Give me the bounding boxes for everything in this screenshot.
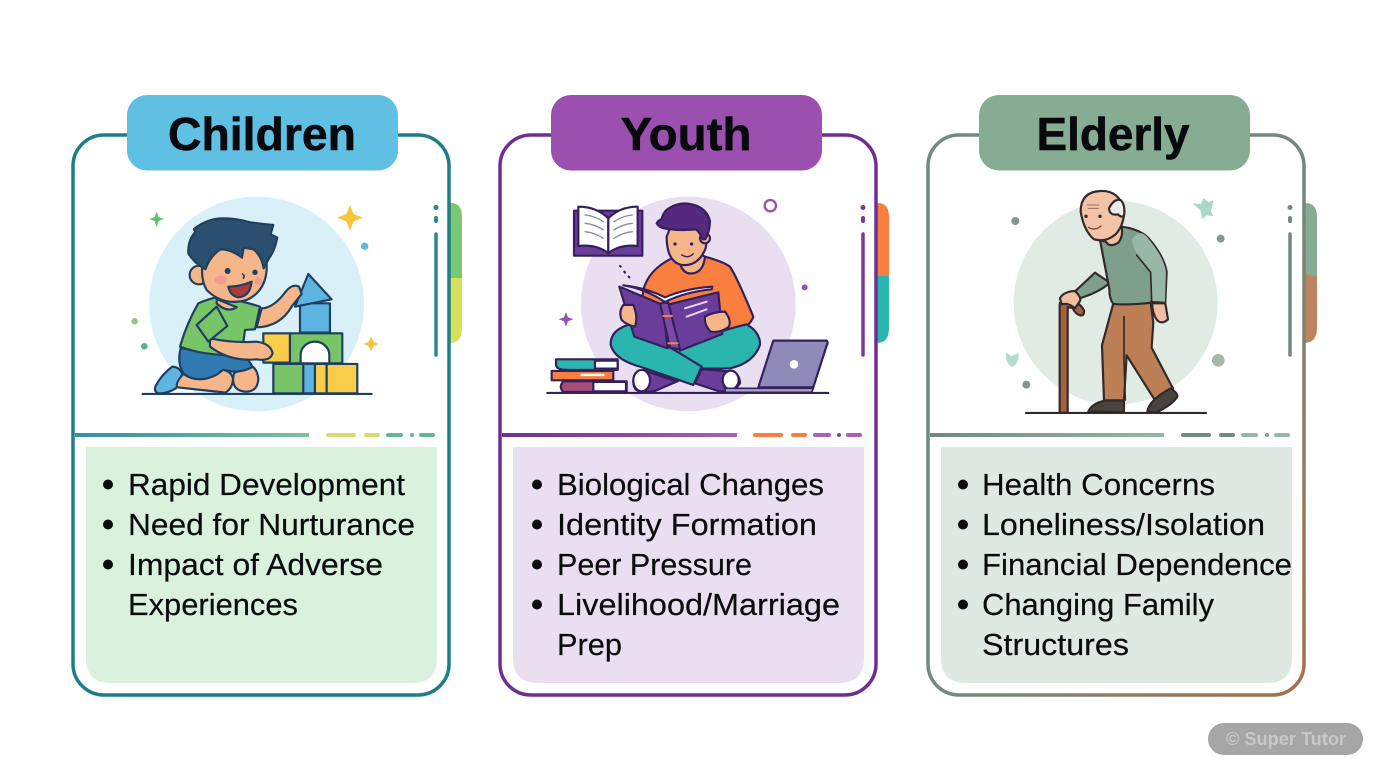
text panel: youth: Prep <box>557 627 622 662</box>
text panel: elderly <box>941 447 1292 683</box>
side tab: children <box>448 203 462 343</box>
decorative side marks: youth <box>861 206 865 355</box>
heading: children <box>127 95 398 170</box>
heading: elderly <box>979 95 1250 170</box>
text panel: youth <box>513 447 864 683</box>
decorative side marks: children <box>434 206 438 355</box>
text panel: elderly: Health Concerns <box>982 467 1215 502</box>
divider: youth <box>502 433 860 437</box>
text panel: youth: Peer Pressure <box>557 547 752 582</box>
text panel: children: Need for Nurturance <box>128 507 415 542</box>
heading: youth: Youth <box>620 108 752 160</box>
text panel: youth: Livelihood/Marriage <box>557 587 840 622</box>
side tab: youth <box>875 203 889 343</box>
panel: children <box>73 95 462 695</box>
text panel: elderly: Changing Family <box>982 587 1214 622</box>
divider: children <box>75 433 433 437</box>
text panel: children: Experiences <box>128 587 298 622</box>
illustration: child building blocks <box>131 197 379 411</box>
side tab: elderly <box>1302 203 1317 343</box>
text panel: children <box>86 447 437 683</box>
text panel: youth: Identity Formation <box>557 507 817 542</box>
watermark <box>1208 723 1363 755</box>
card outline: children <box>73 135 449 695</box>
heading: youth <box>551 95 822 170</box>
text panel: youth: Biological Changes <box>557 467 824 502</box>
card outline: elderly <box>928 135 1304 695</box>
illustration: elderly with cane <box>1006 191 1225 413</box>
panel: elderly <box>928 95 1317 695</box>
card outline: youth <box>500 135 876 695</box>
text panel: elderly: Structures <box>982 627 1129 662</box>
text panel: elderly: Loneliness/Isolation <box>982 507 1265 542</box>
panel: youth <box>500 95 889 695</box>
divider: elderly <box>930 433 1288 437</box>
illustration: youth reading <box>547 197 828 411</box>
text panel: elderly: Financial Dependence <box>982 547 1292 582</box>
heading: children: Children <box>168 108 356 160</box>
decorative side marks: elderly <box>1288 206 1292 355</box>
heading: elderly: Elderly <box>1036 108 1190 160</box>
watermark: © Super Tutor <box>1226 729 1346 749</box>
text panel: children: Rapid Development <box>128 467 405 502</box>
text panel: children: Impact of Adverse <box>128 547 383 582</box>
